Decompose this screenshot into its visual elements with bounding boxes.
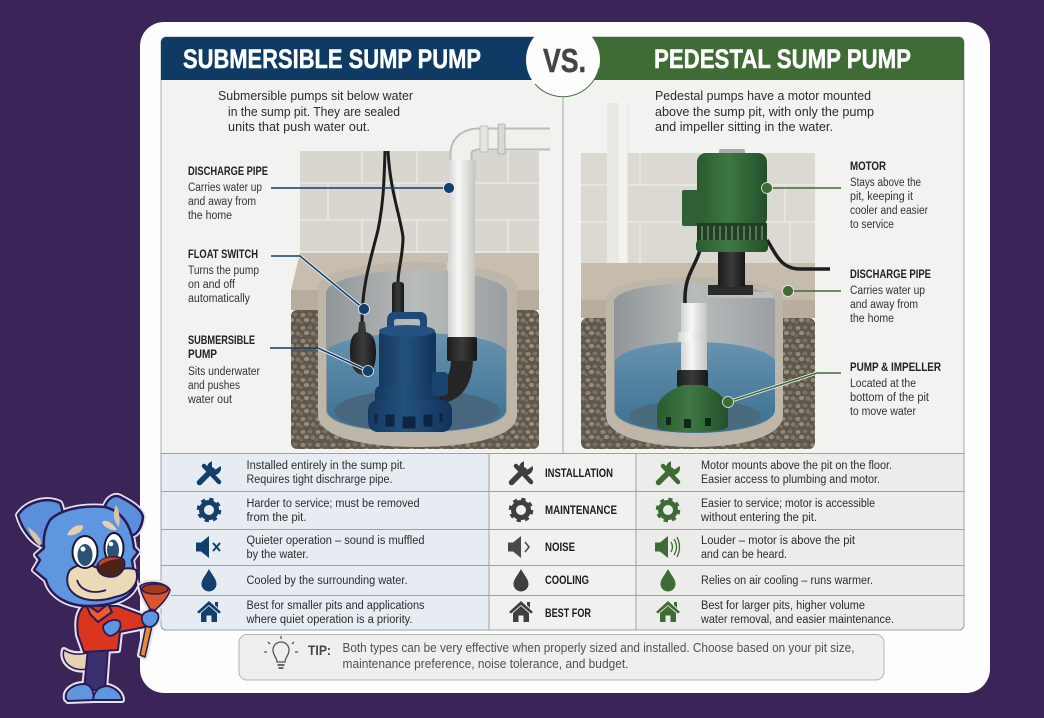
row: maintenance: from the pit. bbox=[246, 512, 306, 524]
intro: submersible: units that push water out. bbox=[228, 119, 370, 134]
discharge pipe bbox=[438, 124, 550, 392]
label: discharge pipe bbox=[850, 269, 931, 325]
label: discharge pipe: DISCHARGE PIPE bbox=[850, 269, 931, 281]
right ear bbox=[105, 496, 143, 535]
label: discharge pipe: the home bbox=[188, 210, 232, 222]
row: cooling: COOLING bbox=[545, 575, 589, 587]
label: submersible pump: water out bbox=[187, 394, 233, 406]
row: cooling bbox=[202, 569, 873, 592]
row: maintenance bbox=[198, 498, 875, 524]
row: noise: Quieter operation – sound is muffled bbox=[246, 535, 424, 547]
label: motor: MOTOR bbox=[850, 161, 887, 173]
mascot white outline bbox=[18, 496, 170, 701]
row: noise: by the water. bbox=[246, 549, 308, 561]
row: installation: Installed entirely in the sump pit. bbox=[246, 460, 406, 472]
mascot: blue dog with plunger bbox=[18, 496, 170, 701]
row: cooling: Cooled by the surrounding water. bbox=[246, 575, 408, 587]
row: installation: Motor mounts above the pit on the floor. bbox=[701, 460, 892, 472]
legs and feet bbox=[66, 648, 122, 701]
row: maintenance: Harder to service; must be removed bbox=[246, 498, 420, 510]
label: motor: Stays above the bbox=[850, 177, 921, 189]
VS badge: VS. bbox=[543, 42, 586, 79]
mouth bbox=[77, 580, 106, 592]
wall column bbox=[598, 103, 636, 268]
label: pump and impeller: to move water bbox=[850, 406, 916, 418]
submersible pump body bbox=[368, 312, 452, 432]
label: pump and impeller: bottom of the pit bbox=[850, 392, 930, 404]
intro: pedestal: Pedestal pumps have a motor mounted bbox=[655, 88, 871, 103]
label: discharge pipe: Carries water up bbox=[188, 182, 262, 194]
tail bbox=[63, 650, 90, 670]
label: motor: pit, keeping it bbox=[850, 191, 914, 203]
head bbox=[34, 507, 138, 606]
label: discharge pipe: Carries water up bbox=[850, 285, 925, 297]
comparison table bbox=[161, 453, 964, 630]
intro: pedestal bbox=[655, 88, 874, 134]
label: submersible pump: Sits underwater bbox=[188, 366, 260, 378]
motor bbox=[682, 149, 768, 252]
intro: pedestal: and impeller sitting in the water. bbox=[655, 119, 833, 134]
label: pump and impeller bbox=[850, 362, 942, 418]
row: maintenance: without entering the pit. bbox=[700, 512, 817, 524]
illustration: pedestal pump bbox=[581, 103, 841, 449]
row: installation: Easier access to plumbing and motor. bbox=[701, 474, 880, 486]
row: best for: water removal, and easier maintenance. bbox=[700, 614, 894, 626]
tip box: maintenance preference, noise tolerance, and budget. bbox=[342, 657, 628, 671]
row: noise: Louder – motor is above the pit bbox=[701, 535, 856, 547]
row: noise: NOISE bbox=[545, 542, 575, 554]
row: best for: where quiet operation is a priority. bbox=[246, 614, 412, 626]
leader lines: pedestal bbox=[722, 182, 841, 408]
intro: pedestal: above the sump pit, with only the pump bbox=[655, 104, 874, 119]
tip box bbox=[239, 634, 884, 680]
row: installation: INSTALLATION bbox=[545, 468, 613, 480]
label: submersible pump bbox=[187, 335, 260, 406]
label: float switch: on and off bbox=[188, 279, 236, 291]
intro: submersible: in the sump pit. They are sealed bbox=[228, 104, 400, 119]
label: motor bbox=[850, 161, 928, 231]
row: cooling: Relies on air cooling – runs warmer. bbox=[701, 575, 873, 587]
row: noise bbox=[196, 535, 856, 561]
row: best for: BEST FOR bbox=[545, 608, 592, 620]
hands bbox=[103, 611, 158, 636]
riser pipe bbox=[677, 303, 708, 387]
pump and impeller bbox=[657, 385, 728, 432]
label: submersible pump: PUMP bbox=[188, 349, 217, 361]
label: float switch: Turns the pump bbox=[188, 265, 259, 277]
row: best for: Best for smaller pits and applications bbox=[246, 600, 425, 612]
label: pump and impeller: Located at the bbox=[850, 378, 916, 390]
row: noise: and can be heard. bbox=[701, 549, 787, 561]
row: installation: Requires tight dischrarge pipe. bbox=[246, 474, 392, 486]
label: discharge pipe: the home bbox=[850, 313, 894, 325]
muzzle bbox=[67, 565, 137, 600]
VS badge bbox=[526, 23, 600, 97]
labels: pedestal bbox=[850, 161, 942, 418]
label: discharge pipe: DISCHARGE PIPE bbox=[188, 166, 268, 178]
pedestal shaft and plate bbox=[707, 250, 773, 298]
left header: SUBMERSIBLE SUMP PUMP bbox=[183, 44, 481, 74]
tip box: TIP: bbox=[308, 642, 331, 658]
illustration: submersible pump bbox=[270, 124, 550, 449]
nose bbox=[97, 557, 125, 577]
intro: submersible: Submersible pumps sit below water bbox=[218, 88, 414, 103]
intro: submersible bbox=[218, 88, 414, 134]
left header bbox=[161, 37, 563, 80]
eyebrows bbox=[67, 521, 117, 535]
right header bbox=[563, 37, 964, 80]
labels: submersible bbox=[187, 166, 268, 406]
row: best for: Best for larger pits, higher volume bbox=[701, 600, 865, 612]
float switch bbox=[350, 322, 376, 375]
tip box: Both types can be very effective when properly sized and installed. Choose based on your pit size, bbox=[342, 641, 854, 655]
cables bbox=[362, 151, 404, 323]
leader lines: submersible bbox=[270, 182, 454, 376]
label: motor: cooler and easier bbox=[850, 205, 928, 217]
red shirt bbox=[77, 604, 145, 652]
label: discharge pipe: and away from bbox=[850, 299, 918, 311]
eyes bbox=[72, 533, 124, 568]
label: float switch: FLOAT SWITCH bbox=[188, 249, 258, 261]
label: submersible pump: SUBMERSIBLE bbox=[188, 335, 255, 347]
row: maintenance: Easier to service; motor is accessible bbox=[701, 498, 875, 510]
label: motor: to service bbox=[850, 219, 894, 231]
label: pump and impeller: PUMP & IMPELLER bbox=[850, 362, 942, 374]
row: maintenance: MAINTENANCE bbox=[545, 505, 617, 517]
label: submersible pump: and pushes bbox=[188, 380, 240, 392]
right header: PEDESTAL SUMP PUMP bbox=[654, 44, 911, 74]
power cables bbox=[685, 240, 830, 303]
label: discharge pipe bbox=[188, 166, 268, 222]
row: installation bbox=[200, 460, 892, 486]
white card bbox=[140, 22, 990, 693]
inner ears bbox=[28, 505, 120, 546]
label: float switch: automatically bbox=[188, 293, 250, 305]
left ear bbox=[18, 500, 62, 547]
label: float switch bbox=[188, 249, 259, 305]
comparison panel bbox=[161, 23, 964, 630]
icon: light bulb bbox=[264, 636, 298, 668]
row: best for bbox=[197, 600, 894, 626]
label: discharge pipe: and away from bbox=[188, 196, 256, 208]
plunger bbox=[140, 583, 170, 657]
